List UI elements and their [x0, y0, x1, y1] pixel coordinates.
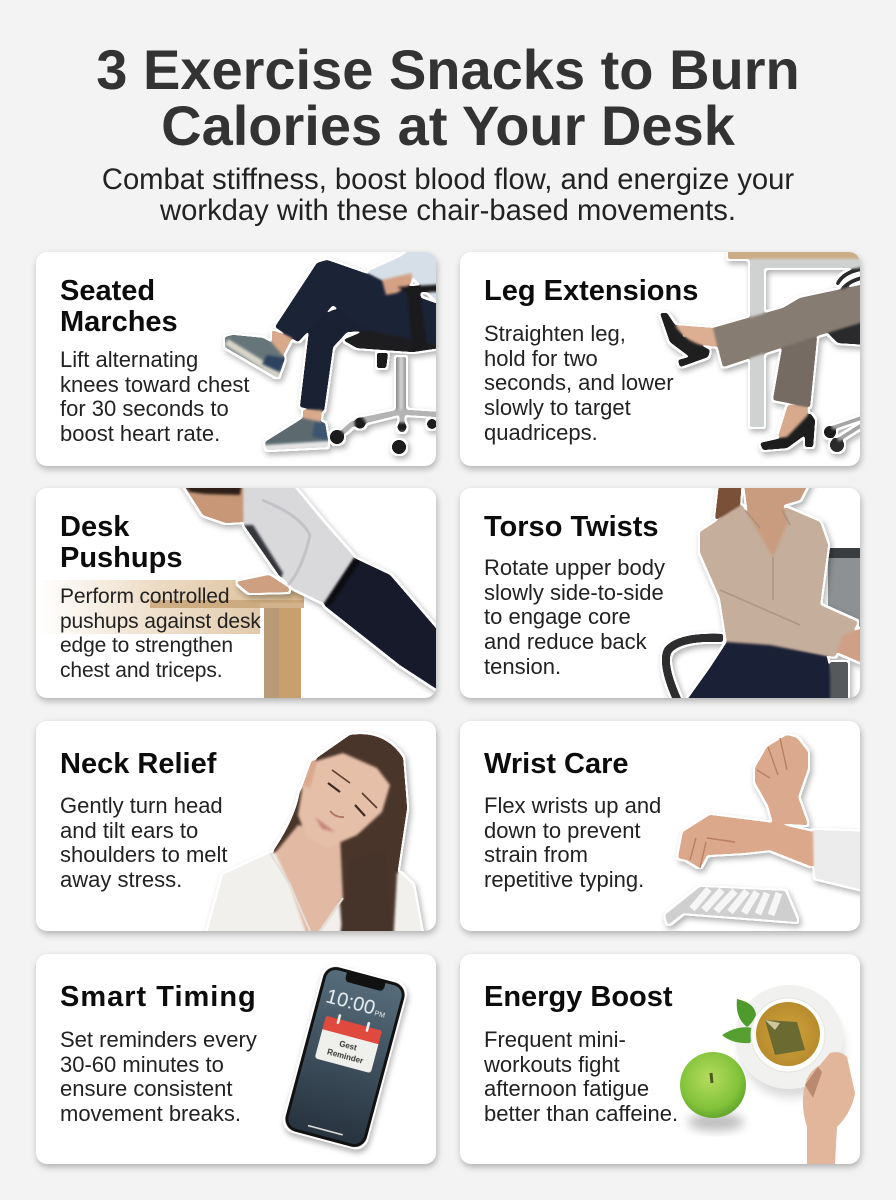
illustration: phone with calendar reminder: Reminder: [326, 1047, 364, 1066]
description: knees toward chest: [60, 372, 250, 397]
description: and reduce back: [484, 629, 647, 654]
description: workouts fight: [484, 1052, 620, 1077]
description: Set reminders every: [60, 1027, 257, 1052]
finger lines: [690, 738, 787, 868]
description: to engage core: [484, 604, 631, 629]
heading: Seated: [60, 275, 155, 307]
panel: leg extensions: [460, 252, 860, 466]
description: Rotate upper body: [484, 555, 665, 580]
subtitle: [102, 164, 794, 227]
description: [484, 321, 674, 445]
description: Flex wrists up and: [484, 793, 661, 818]
description: quadriceps.: [484, 420, 598, 445]
man: [176, 476, 446, 695]
description: repetitive typing.: [484, 867, 644, 892]
cup: [751, 998, 825, 1072]
description: [60, 347, 250, 446]
description: [60, 585, 261, 682]
wood desk: [36, 580, 304, 698]
heading: [60, 275, 178, 338]
panel: torso twists: [460, 488, 860, 698]
panel: desk pushups: [36, 488, 436, 698]
subtitle: workday with these chair-based movements.: [160, 195, 736, 227]
heading: Energy Boost: [484, 981, 673, 1013]
description: Frequent mini-: [484, 1027, 626, 1052]
description: boost heart rate.: [60, 421, 220, 446]
description: and tilt ears to: [60, 818, 198, 843]
description: afternoon fatigue: [484, 1076, 649, 1101]
hand: [803, 1052, 855, 1164]
description: Straighten leg,: [484, 321, 626, 346]
description: shoulders to melt: [60, 842, 228, 867]
panel: wrist care: [460, 721, 860, 931]
description: ensure consistent: [60, 1076, 232, 1101]
description: [484, 1027, 678, 1126]
description: down to prevent: [484, 818, 641, 843]
blouse folds: [720, 510, 800, 625]
heading: Torso Twists: [484, 511, 659, 543]
description: seconds, and lower: [484, 370, 674, 395]
description: movement breaks.: [60, 1101, 241, 1126]
description: [60, 1027, 257, 1126]
description: slowly to target: [484, 395, 631, 420]
facial details: [270, 770, 377, 931]
keyboard keys: [692, 889, 779, 915]
illustration: seated marches on office chair: [222, 252, 436, 462]
description: away stress.: [60, 867, 182, 892]
illustration: phone with calendar reminder: [281, 965, 412, 1156]
description: chest and triceps.: [60, 659, 222, 682]
description: Perform controlled: [60, 585, 229, 608]
heading: Desk: [60, 511, 129, 543]
heading: Pushups: [60, 542, 182, 574]
illustration: torso twist in chair: [658, 488, 860, 698]
heading: Smart Timing: [60, 981, 257, 1013]
heading: Neck Relief: [60, 748, 216, 780]
description: [484, 555, 665, 679]
description: better than caffeine.: [484, 1101, 678, 1126]
saucer: [735, 985, 843, 1089]
title: [96, 38, 800, 157]
description: [60, 793, 228, 892]
heading: Marches: [60, 306, 178, 338]
title: 3 Exercise Snacks to Burn: [96, 38, 800, 101]
description: pushups against desk: [60, 610, 261, 633]
leaves: [737, 999, 756, 1027]
illustration: woman tilting head: [204, 732, 428, 931]
panel: energy boost: [460, 954, 860, 1164]
title: Calories at Your Desk: [161, 94, 735, 157]
description: Lift alternating: [60, 347, 198, 372]
shirt sleeve shading: [262, 500, 310, 585]
subtitle: Combat stiffness, boost blood flow, and energize your: [102, 164, 794, 196]
description: 30-60 minutes to: [60, 1052, 224, 1077]
illustration: leg extension under desk: [658, 252, 860, 460]
description: [484, 793, 661, 892]
apple: [680, 1052, 746, 1118]
description: hold for two: [484, 346, 598, 371]
illustration: desk pushups: [54, 488, 436, 698]
illustration: phone with calendar reminder: 10:00PM: [323, 985, 389, 1023]
illustration: wrists and keyboard: [662, 733, 860, 931]
description: strain from: [484, 842, 588, 867]
illustration: green tea, apple and hand: [680, 985, 855, 1164]
description: Gently turn head: [60, 793, 223, 818]
heading: [60, 511, 182, 574]
heading: Leg Extensions: [484, 275, 698, 307]
panel: smart timing: [36, 954, 436, 1164]
panel: seated marches: [36, 252, 436, 466]
description: tension.: [484, 654, 561, 679]
panel: neck relief: [36, 721, 436, 931]
heading: Wrist Care: [484, 748, 629, 780]
description: for 30 seconds to: [60, 396, 229, 421]
illustration: phone with calendar reminder: Gest: [338, 1039, 358, 1053]
description: edge to strengthen: [60, 634, 233, 657]
description: slowly side-to-side: [484, 580, 664, 605]
